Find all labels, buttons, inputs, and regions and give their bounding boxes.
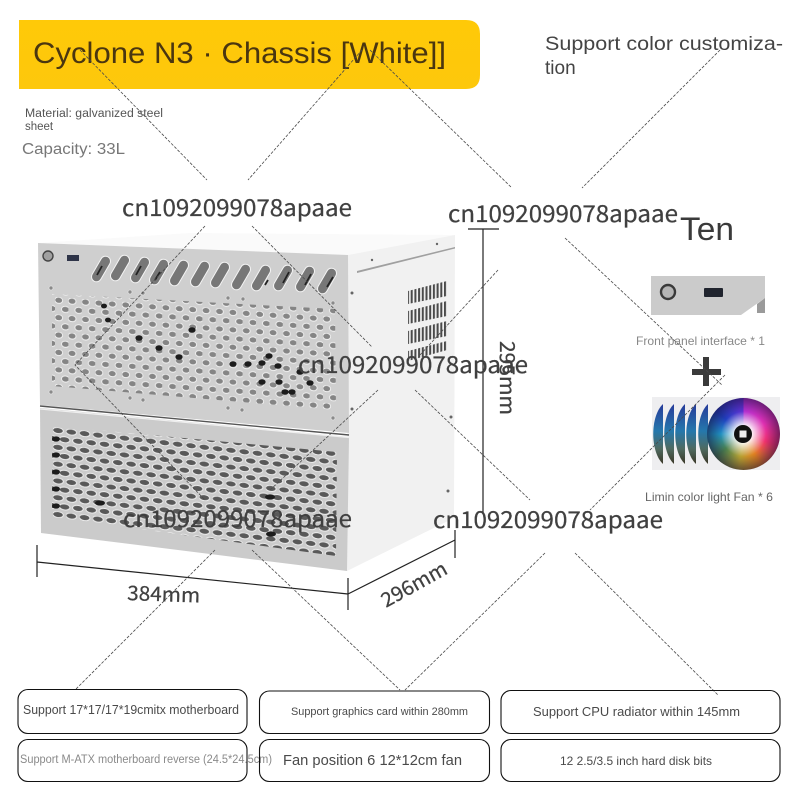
watermark code 2: cn1092099078apaae bbox=[448, 195, 678, 229]
spec box: CPU radiator: Support CPU radiator within 145mm bbox=[533, 704, 740, 719]
front panel interface photo bbox=[651, 276, 765, 315]
front panel caption: Front panel interface * 1 bbox=[636, 334, 765, 348]
fan caption: Limin color light Fan * 6 bbox=[645, 490, 773, 504]
spec box: graphics card: Support graphics card within 280mm bbox=[291, 706, 468, 718]
large fan bbox=[707, 398, 780, 470]
power button bbox=[43, 251, 53, 261]
right side screws bbox=[350, 243, 452, 492]
usb port bbox=[67, 255, 79, 261]
rgb fans bbox=[652, 397, 780, 470]
spec box: CPU radiator bbox=[501, 690, 780, 734]
fan hub bbox=[734, 425, 752, 443]
capacity text: Capacity: 33L bbox=[22, 141, 125, 158]
top ventilation slots bbox=[90, 253, 338, 296]
height dimension label: 295mm bbox=[494, 341, 523, 415]
watermark code 5: cn1092099078apaae bbox=[433, 501, 663, 535]
watermark code 3: cn1092099078apaae bbox=[298, 346, 528, 380]
width dimension label: 384mm bbox=[127, 577, 201, 609]
dashed watermark lines bbox=[75, 50, 725, 695]
material text: sheet bbox=[25, 121, 54, 133]
lower perforation bbox=[50, 420, 340, 560]
lower front panel bbox=[40, 408, 349, 571]
spec box: fan positions: Fan position 6 12*12cm fan bbox=[283, 752, 462, 769]
spec box: mini-ITX motherboard bbox=[18, 690, 247, 734]
top face bbox=[38, 233, 455, 255]
material text: Material: galvanized steel bbox=[25, 108, 163, 120]
customization note: Support color customiza- bbox=[545, 34, 783, 55]
spec box: fan positions bbox=[260, 740, 490, 782]
spec box: graphics card bbox=[260, 691, 490, 734]
right side vents bbox=[408, 281, 447, 361]
watermark code 4: cn1092099078apaae bbox=[123, 500, 352, 534]
title banner bbox=[19, 20, 480, 89]
plus sign bbox=[692, 357, 721, 386]
chassis product image bbox=[38, 233, 455, 571]
title banner: Cyclone N3 · Chassis [White]] bbox=[33, 37, 446, 70]
front panel screws bbox=[49, 286, 335, 420]
right side face bbox=[347, 235, 455, 571]
dark stripes inside slots bbox=[97, 266, 333, 287]
upper front panel bbox=[38, 243, 349, 433]
watermark code 1: cn1092099078apaae bbox=[122, 189, 352, 223]
spec box: M-ATX motherboard bbox=[18, 740, 272, 782]
accessory heading: Ten bbox=[680, 211, 734, 247]
customization note: tion bbox=[545, 58, 576, 79]
spec box: M-ATX motherboard: Support M-ATX motherboard reverse (24.5*24.5cm) bbox=[20, 754, 272, 766]
dark holes seen through the mesh bbox=[52, 304, 314, 537]
spec box: hard disk bays: 12 2.5/3.5 inch hard disk bits bbox=[560, 754, 712, 768]
spec box: mini-ITX motherboard: Support 17*17/17*19cmitx motherboard bbox=[23, 703, 239, 717]
upper perforation bbox=[50, 290, 340, 415]
dimension lines bbox=[37, 229, 499, 610]
spec box: hard disk bays bbox=[501, 740, 780, 782]
depth dimension label: 296mm bbox=[375, 553, 452, 613]
